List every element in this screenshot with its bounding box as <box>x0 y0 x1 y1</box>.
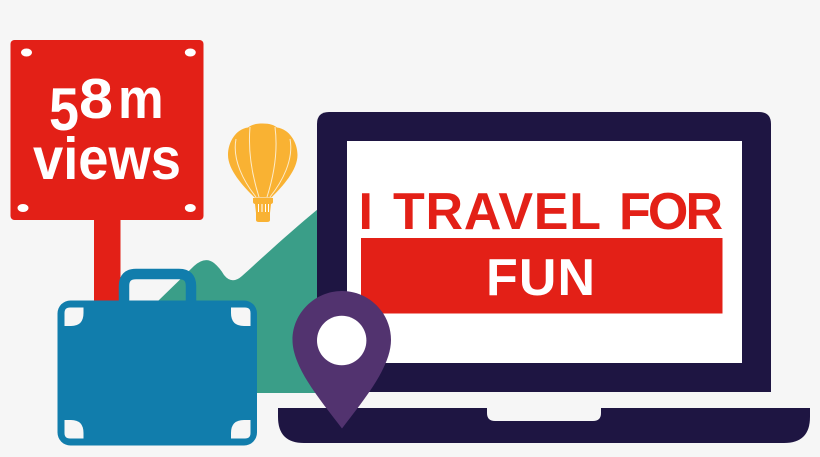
screen headline: FOR <box>619 183 723 241</box>
sign board <box>10 40 204 220</box>
sign text: 58m: 8 <box>79 67 113 131</box>
laptop lid <box>317 112 771 392</box>
balloon seams <box>235 127 291 197</box>
laptop <box>278 112 810 443</box>
sign text: 58m <box>49 67 164 143</box>
screen headline: I <box>358 183 373 241</box>
icon: suitcase <box>58 274 257 446</box>
sign text: views: views <box>33 126 181 192</box>
sign mounting holes <box>18 48 196 212</box>
banner text: FUN <box>486 249 595 307</box>
basket ropes <box>258 204 268 212</box>
sign: 58m views <box>10 40 204 305</box>
laptop screen <box>347 141 742 363</box>
icon: location pin <box>292 291 391 428</box>
suitcase handle <box>124 274 191 303</box>
red banner <box>361 238 722 314</box>
icon: hot air balloon <box>228 124 298 222</box>
suitcase body <box>58 300 257 446</box>
balloon basket <box>253 198 273 222</box>
pin body <box>292 291 391 428</box>
sign text: 58m: m <box>118 68 164 131</box>
suitcase corners <box>64 308 250 438</box>
laptop notch <box>487 408 601 421</box>
balloon envelope <box>228 124 298 198</box>
sign post <box>94 215 120 305</box>
screen headline: TRAVEL <box>393 183 601 241</box>
screen headline <box>358 183 723 241</box>
pin hole <box>317 316 366 365</box>
sign text: 58m: 5 <box>49 76 79 143</box>
mountain <box>158 209 322 393</box>
laptop base <box>278 408 810 443</box>
